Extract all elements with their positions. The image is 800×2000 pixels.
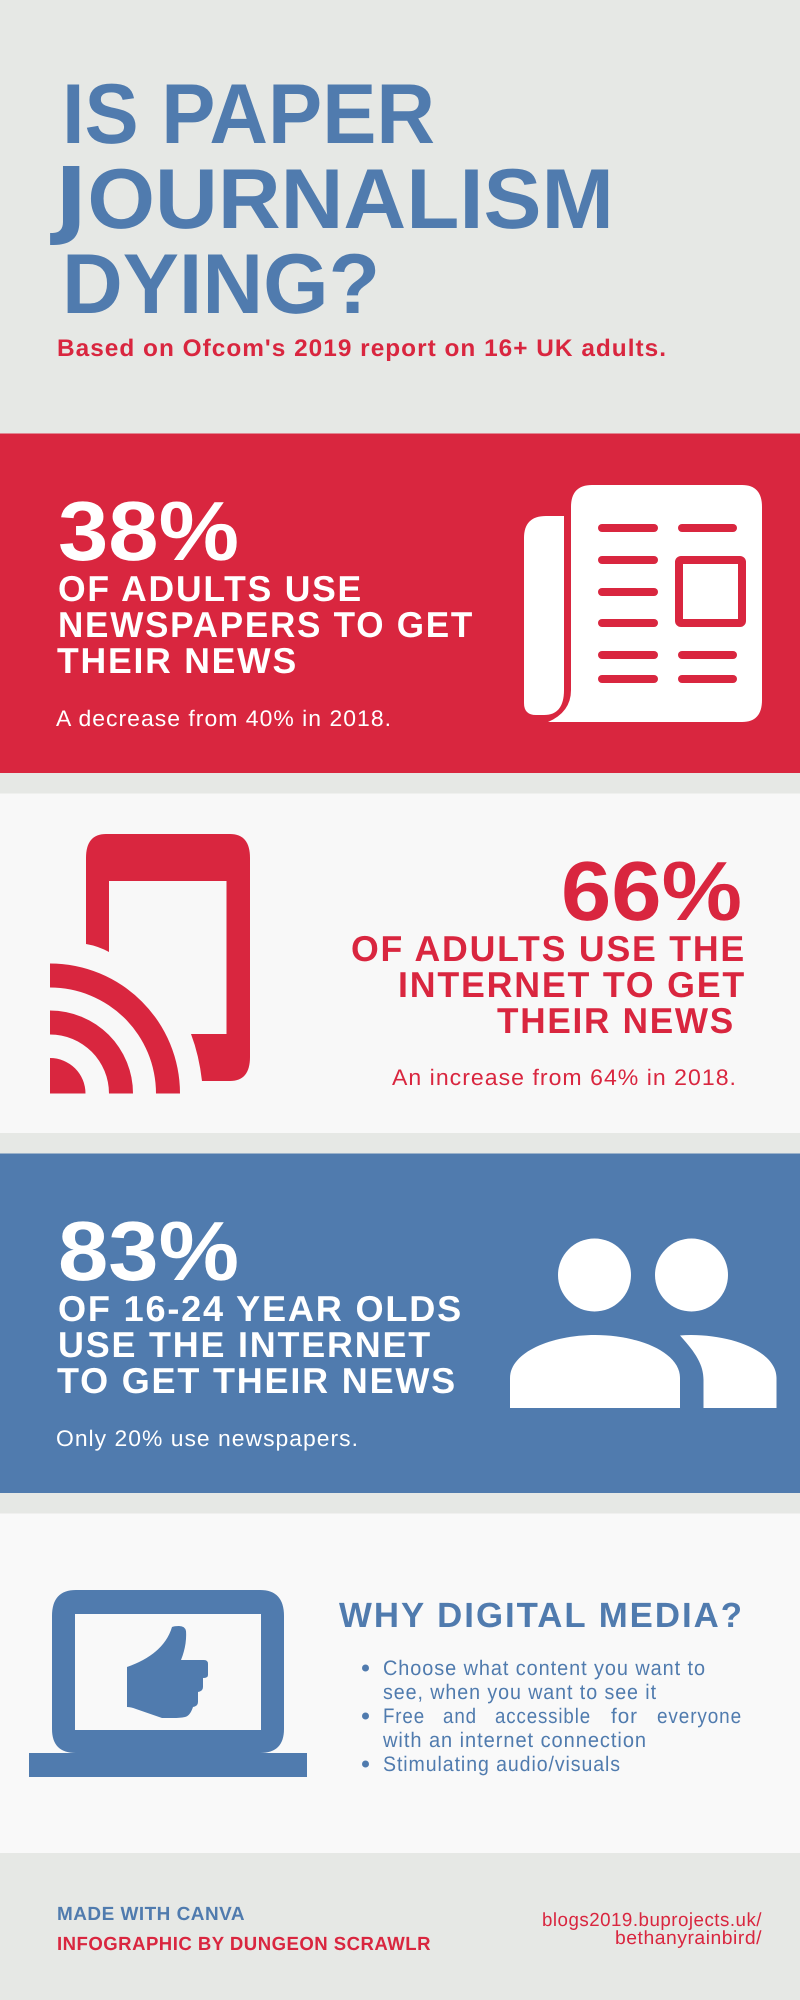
statement: adults using newspapers xyxy=(57,568,474,681)
credit: made with canva: MADE WITH CANVA xyxy=(57,1904,245,1925)
note: increase from 2018: An increase from 64% in 2018. xyxy=(392,1065,737,1090)
title xyxy=(50,67,614,332)
source url: bethanyrainbird/ xyxy=(615,1928,762,1949)
bullet list: Free xyxy=(383,1705,425,1728)
panel: young adults statistic xyxy=(0,1154,800,1493)
panel: newspapers statistic xyxy=(0,434,800,773)
bullet list: everyone xyxy=(657,1705,742,1728)
statement: adults using newspapers: NEWSPAPERS TO GET xyxy=(58,604,474,645)
note: newspaper use: Only 20% use newspapers. xyxy=(56,1426,359,1451)
stat: 66%: 66% xyxy=(561,844,742,938)
statement: adults using the internet: OF ADULTS USE THE xyxy=(351,928,746,969)
bullet list xyxy=(362,1657,742,1776)
bullet list: Choose what content you want to xyxy=(383,1657,706,1680)
bullet list: accessible xyxy=(495,1705,591,1728)
panel: header xyxy=(0,0,800,433)
title: JOURNALISM xyxy=(50,150,614,249)
statement: 16-24 year olds using the internet: TO GET THEIR NEWS xyxy=(57,1360,457,1401)
panel: internet statistic xyxy=(0,794,800,1133)
icon: two people xyxy=(510,1238,776,1408)
bullet list: for xyxy=(611,1705,638,1728)
subtitle: Based on Ofcom's 2019 report on 16+ UK adults. xyxy=(57,335,667,362)
credit: infographic author: INFOGRAPHIC BY DUNGEON SCRAWLR xyxy=(57,1934,431,1955)
statement: adults using newspapers: THEIR NEWS xyxy=(57,640,298,681)
bullet list: and xyxy=(443,1705,477,1728)
bullet list: with an internet connection xyxy=(382,1729,647,1752)
statement: 16-24 year olds using the internet xyxy=(57,1288,463,1401)
statement: 16-24 year olds using the internet: OF 16-24 YEAR OLDS xyxy=(58,1288,463,1329)
bullet list: see, when you want to see it xyxy=(383,1681,657,1704)
panel: footer xyxy=(0,1853,800,2000)
statement: adults using newspapers: OF ADULTS USE xyxy=(58,568,363,609)
source url xyxy=(542,1910,762,1949)
icon: newspaper xyxy=(524,485,762,722)
statement: 16-24 year olds using the internet: USE THE INTERNET xyxy=(58,1324,432,1365)
icon: phone with signal arcs xyxy=(50,834,250,1094)
note: decrease from 2018: A decrease from 40% in 2018. xyxy=(56,706,392,731)
statement: adults using the internet: INTERNET TO GET xyxy=(398,964,746,1005)
stat: 38%: 38% xyxy=(58,484,239,578)
title: IS PAPER xyxy=(62,67,435,162)
stat: 83%: 83% xyxy=(58,1204,239,1298)
heading: why digital media: WHY DIGITAL MEDIA? xyxy=(339,1596,744,1635)
icon: laptop with thumbs up xyxy=(29,1590,307,1777)
statement: adults using the internet xyxy=(351,928,746,1041)
bullet list: Stimulating audio/visuals xyxy=(383,1753,621,1776)
panel: why digital media xyxy=(0,1514,800,1853)
title: DYING? xyxy=(62,237,380,332)
source url: blogs2019.buprojects.uk/ xyxy=(542,1910,762,1931)
statement: adults using the internet: THEIR NEWS xyxy=(497,1000,735,1041)
